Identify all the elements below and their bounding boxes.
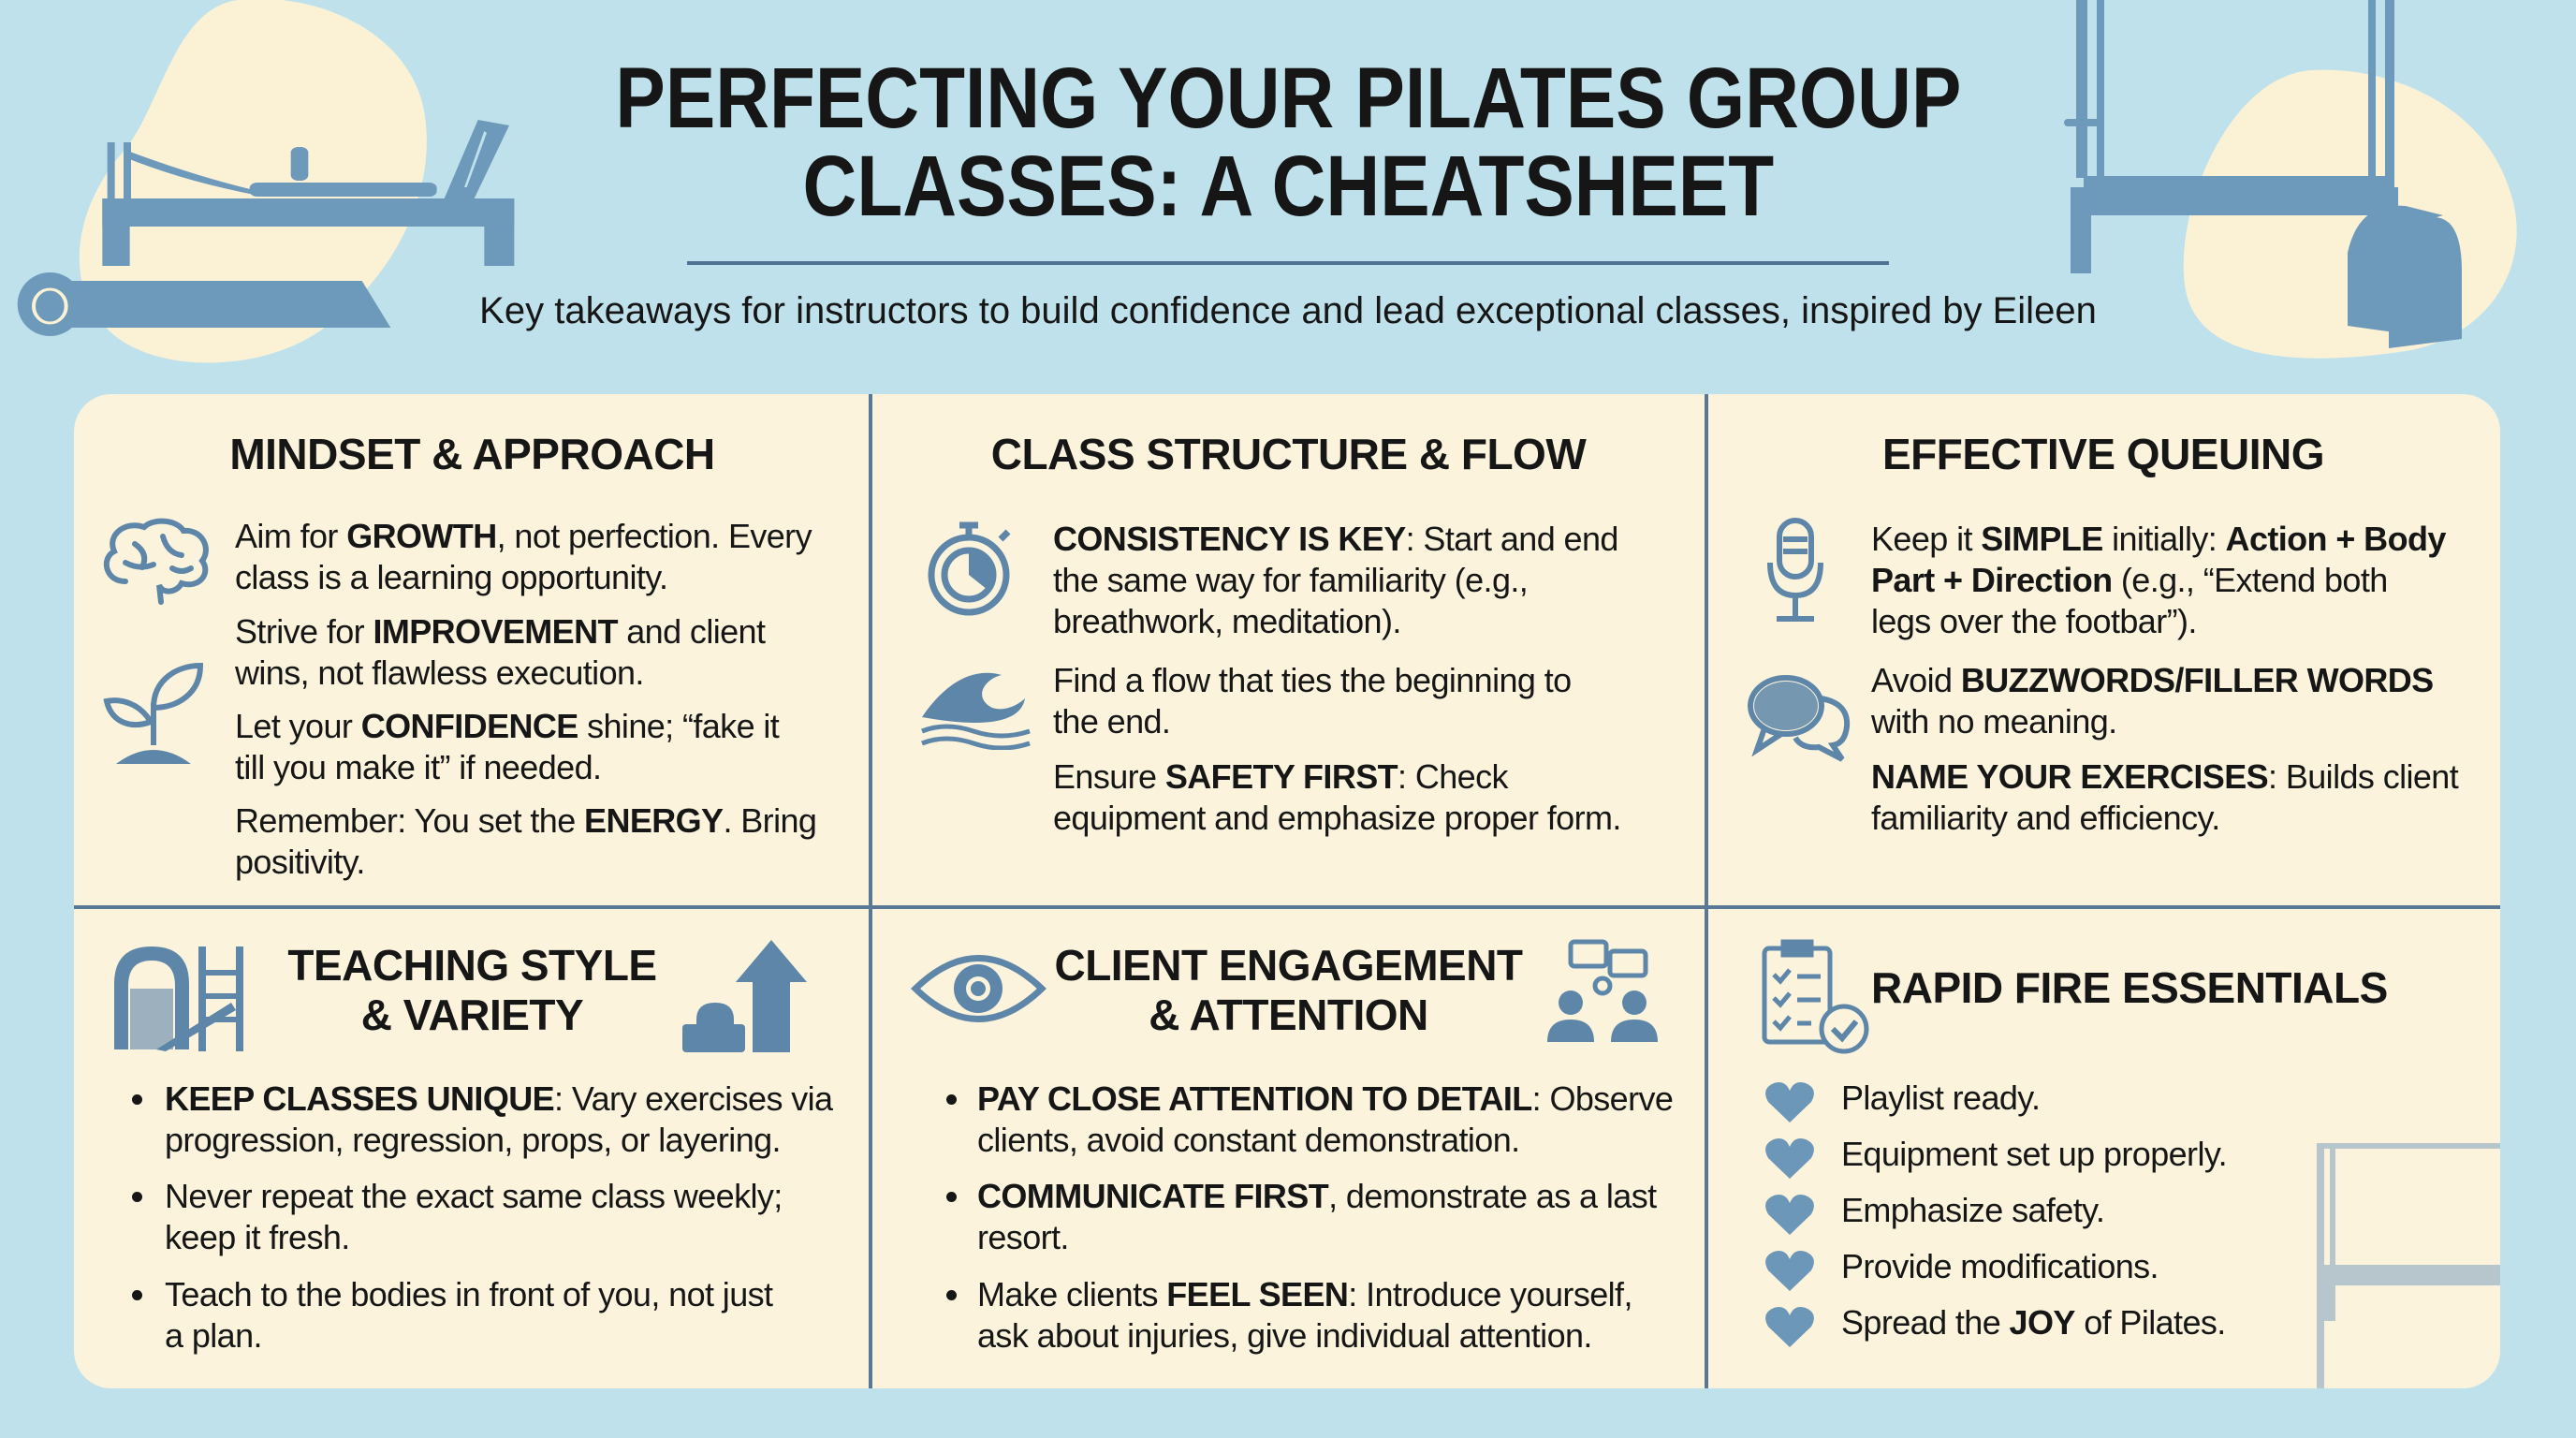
panel: effective queuing: with no meaning.: [1871, 702, 2117, 741]
text blocks: [235, 517, 812, 596]
panel: mindset & approach: [103, 430, 816, 881]
text blocks: Keep it SIMPLE initially: Action + Body: [1871, 520, 2446, 558]
list with heart icons: Provide modifications.: [1841, 1247, 2159, 1285]
panel: client engagement & attention: ask about injuries, give individual attention.: [977, 1316, 1592, 1355]
panel: client engagement & attention: PAY CLOSE ATTENTION TO DETAIL: Observe: [977, 1079, 1673, 1118]
panel: class structure & flow: [921, 430, 1621, 837]
title: PERFECTING YOUR PILATES GROUP: [615, 51, 1961, 146]
heading: & VARIETY: [361, 990, 583, 1039]
text blocks: breathwork, meditation).: [1053, 602, 1401, 640]
panel: teaching style & variety: [114, 940, 833, 1355]
panel: class structure & flow: the end.: [1053, 702, 1170, 741]
panel: effective queuing: familiarity and efficiency.: [1871, 799, 2220, 837]
heading: [287, 941, 657, 1039]
text blocks: CONSISTENCY IS KEY: Start and end: [1053, 520, 1618, 558]
icon: chat bubbles: [1748, 675, 1850, 762]
panel: teaching style & variety: KEEP CLASSES UNIQUE: Vary exercises via: [165, 1079, 832, 1118]
heading: TEACHING STYLE: [287, 941, 657, 990]
panel: teaching style & variety: Never repeat the exact same class weekly;: [165, 1177, 783, 1215]
text blocks: class is a learning opportunity.: [235, 558, 667, 596]
list with heart icons: Playlist ready.: [1841, 1078, 2040, 1117]
panel: client engagement & attention: Make clients FEEL SEEN: Introduce yourself,: [977, 1275, 1632, 1313]
icon: barrel and ladder: [114, 946, 243, 1051]
icon: sprout: [103, 663, 203, 764]
subtitle: Key takeaways for instructors to build confidence and lead exceptional classes, inspired by Eileen: [479, 290, 2097, 331]
panel: teaching style & variety: a plan.: [165, 1316, 262, 1355]
panel: teaching style & variety: progression, regression, props, or layering.: [165, 1121, 781, 1159]
panel: mindset & approach: till you make it” if needed.: [235, 748, 601, 786]
text blocks: [1053, 520, 1618, 640]
title: CLASSES: A CHEATSHEET: [802, 139, 1774, 234]
bullets: [946, 1094, 957, 1105]
panel: mindset & approach: Strive for IMPROVEMENT and client: [235, 612, 765, 651]
panel: effective queuing: [1748, 430, 2458, 837]
bottom-right reformer decoration: [2317, 1143, 2500, 1388]
panel: mindset & approach: Remember: You set the ENERGY. Bring: [235, 801, 816, 840]
panel: teaching style & variety: keep it fresh.: [165, 1218, 350, 1256]
text blocks: the same way for familiarity (e.g.,: [1053, 561, 1528, 599]
panel: rapid fire essentials: [1762, 940, 2388, 1347]
panel: class structure & flow: Ensure SAFETY FIRST: Check: [1053, 757, 1508, 796]
heading: RAPID FIRE ESSENTIALS: [1871, 963, 2388, 1012]
title: [615, 51, 1961, 234]
text blocks: [1871, 520, 2447, 640]
panel: mindset & approach: Let your CONFIDENCE shine; “fake it: [235, 707, 779, 745]
panel: effective queuing: NAME YOUR EXERCISES: Builds client: [1871, 757, 2458, 796]
icon: brain: [103, 519, 209, 605]
text blocks: Aim for GROWTH, not perfection. Every: [235, 517, 812, 555]
bullets: [132, 1094, 142, 1105]
list with heart icons: Equipment set up properly.: [1841, 1135, 2227, 1173]
icon: microphone: [1767, 518, 1823, 622]
heading: & ATTENTION: [1149, 990, 1428, 1039]
icon: wave: [921, 672, 1031, 750]
decoration: top-right blob, tower and barrel: [2064, 0, 2517, 359]
panel: client engagement & attention: [911, 940, 1673, 1355]
icon: eye: [911, 955, 1046, 1022]
panel: class structure & flow: equipment and emphasize proper form.: [1053, 799, 1621, 837]
icon: blocks and arrow: [682, 940, 807, 1052]
list with heart icons: [1765, 1078, 2227, 1347]
panel: class structure & flow: Find a flow that ties the beginning to: [1053, 661, 1572, 699]
icon: clipboard checklist: [1762, 940, 1868, 1054]
panel: teaching style & variety: Teach to the bodies in front of you, not just: [165, 1275, 772, 1313]
panel: client engagement & attention: COMMUNICATE FIRST, demonstrate as a last: [977, 1177, 1657, 1215]
panel: mindset & approach: wins, not flawless execution.: [235, 653, 644, 692]
panel: client engagement & attention: clients, avoid constant demonstration.: [977, 1121, 1520, 1159]
text blocks: Part + Direction (e.g., “Extend both: [1871, 561, 2388, 599]
list with heart icons: Emphasize safety.: [1841, 1191, 2104, 1229]
title underline: [687, 261, 1889, 265]
heading: EFFECTIVE QUEUING: [1882, 430, 2324, 478]
main panel: [74, 394, 2500, 1388]
heading: MINDSET & APPROACH: [229, 430, 715, 478]
panel: mindset & approach: positivity.: [235, 843, 365, 881]
panel: effective queuing: Avoid BUZZWORDS/FILLER WORDS: [1871, 661, 2434, 699]
icon: people with speech: [1547, 940, 1658, 1042]
heading: [1054, 941, 1523, 1039]
icon: stopwatch: [929, 522, 1011, 616]
panel: client engagement & attention: resort.: [977, 1218, 1069, 1256]
heading: CLASS STRUCTURE & FLOW: [991, 430, 1586, 478]
list with heart icons: Spread the JOY of Pilates.: [1841, 1303, 2226, 1342]
heading: CLIENT ENGAGEMENT: [1054, 941, 1523, 990]
decoration: top-left blob and reformer: [17, 0, 515, 363]
text blocks: legs over the footbar”).: [1871, 602, 2197, 640]
